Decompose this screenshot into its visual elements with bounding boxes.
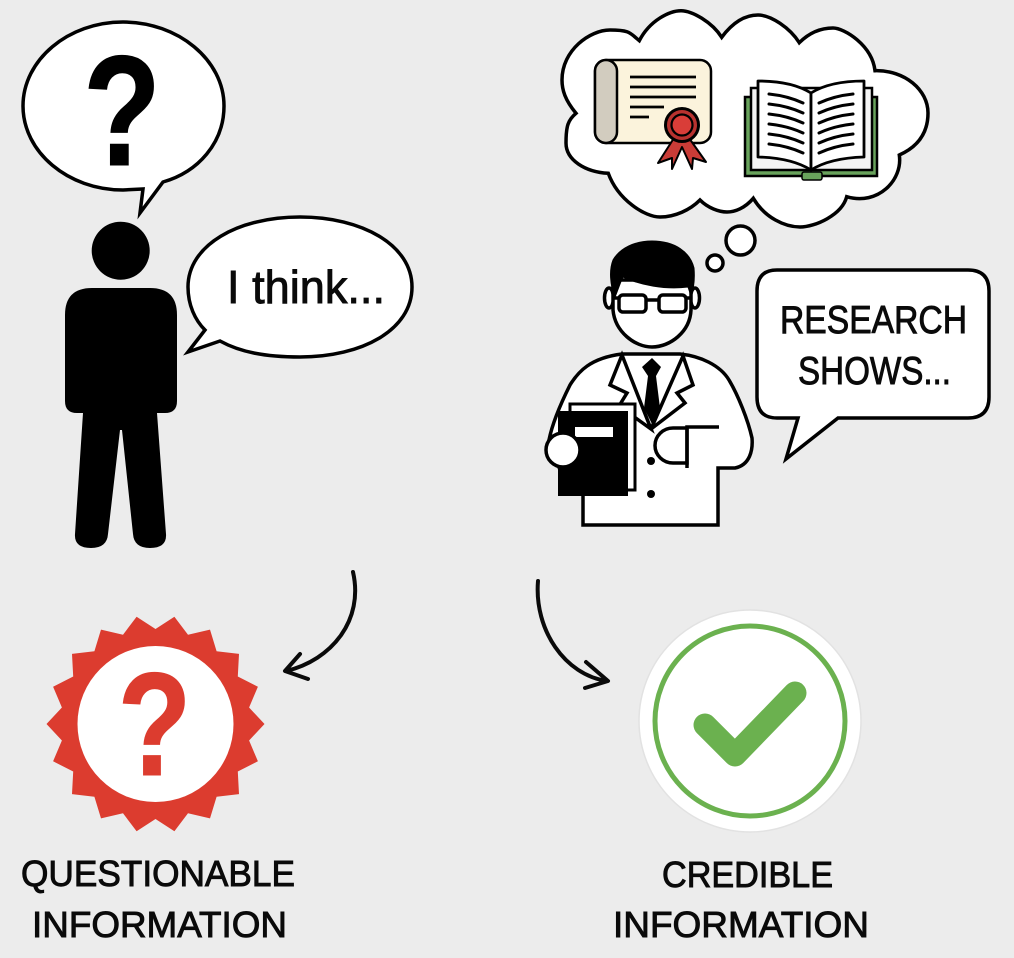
label: questionable information bbox=[21, 853, 295, 945]
speech bubble: research shows bbox=[757, 270, 989, 459]
speech bubble: research shows: SHOWS... bbox=[798, 350, 951, 393]
icon: red warning badge bbox=[46, 617, 264, 831]
right hand and cuff bbox=[655, 427, 719, 468]
label: credible information: CREDIBLE bbox=[662, 854, 833, 895]
figure: uninformed person silhouette bbox=[65, 222, 177, 548]
arrow: to credible bbox=[538, 581, 608, 688]
folder held by arm bbox=[558, 404, 635, 496]
arrow: to questionable bbox=[285, 572, 355, 679]
icon: diploma scroll bbox=[595, 60, 711, 169]
head bbox=[604, 241, 700, 347]
label: questionable information: QUESTIONABLE bbox=[21, 853, 295, 894]
figure: researcher in lab coat bbox=[546, 241, 752, 525]
speech bubble: I think bbox=[188, 217, 412, 357]
thought cloud bbox=[562, 11, 928, 227]
speech bubble: research shows: RESEARCH bbox=[780, 299, 967, 342]
icon: open book bbox=[745, 81, 877, 180]
lapels and collar bbox=[610, 355, 693, 429]
buttons bbox=[647, 457, 655, 498]
thought bubbles bbox=[707, 226, 755, 271]
label: questionable information: INFORMATION bbox=[32, 904, 287, 945]
question speech bubble: ? bbox=[83, 24, 161, 199]
icon: green check badge bbox=[639, 610, 861, 832]
label: credible information bbox=[613, 854, 869, 945]
coat body bbox=[549, 354, 752, 525]
speech bubble: I think: I think... bbox=[227, 261, 385, 313]
icon: red warning badge: ? bbox=[118, 643, 191, 807]
glasses bbox=[612, 295, 691, 312]
tie bbox=[642, 358, 661, 424]
label: credible information: INFORMATION bbox=[613, 904, 869, 945]
left hand bbox=[546, 433, 580, 467]
question speech bubble bbox=[23, 22, 224, 213]
